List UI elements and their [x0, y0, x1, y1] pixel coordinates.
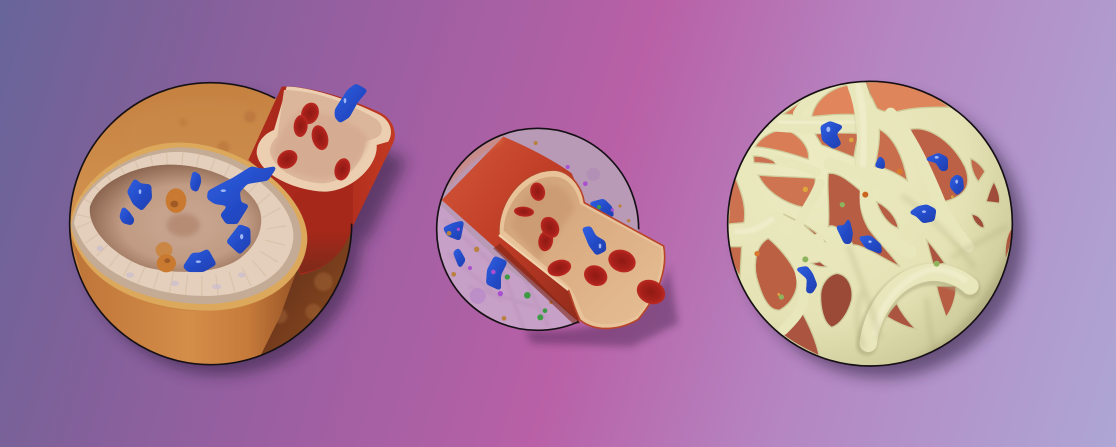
- tissue bubbles: [179, 111, 333, 323]
- panel shadow: [82, 95, 407, 375]
- mesh clip group: [728, 81, 1013, 367]
- cell nuclei: [97, 246, 245, 289]
- panel outline: [437, 128, 639, 330]
- blue cell in tube: [583, 227, 605, 254]
- red blood cells: [274, 100, 353, 182]
- red blood cells in tube: [514, 181, 669, 309]
- tissue circle: [70, 83, 357, 370]
- panel: large vessel cross-section: [70, 83, 407, 375]
- blue cell on vessel rim: [336, 85, 366, 122]
- small particles: [754, 138, 954, 300]
- opened vessel lining: [499, 170, 665, 329]
- tissue background: [432, 128, 639, 340]
- cream strands: [737, 85, 1007, 357]
- red tube: [442, 137, 585, 324]
- blue cells: [797, 122, 963, 292]
- panel: opened vessel with surrounding tissue: [432, 128, 678, 347]
- panel: fibrous mesh: [728, 81, 1024, 378]
- small red vessel: [248, 85, 395, 275]
- small particles: [447, 141, 630, 321]
- blue cells in lumen: [121, 168, 275, 271]
- lower right shade: [914, 246, 1010, 358]
- large lumen and cylinder: [70, 143, 307, 370]
- tissue openings: [728, 82, 1013, 356]
- panel shadow: [741, 94, 1024, 378]
- strand folds: [848, 197, 1007, 357]
- panel shadow: [525, 263, 678, 347]
- orange cells: [156, 188, 186, 272]
- panel outline: [728, 81, 1012, 366]
- cell texture: [445, 220, 548, 333]
- outer blue cells: [444, 200, 613, 289]
- panel outline: [70, 83, 352, 365]
